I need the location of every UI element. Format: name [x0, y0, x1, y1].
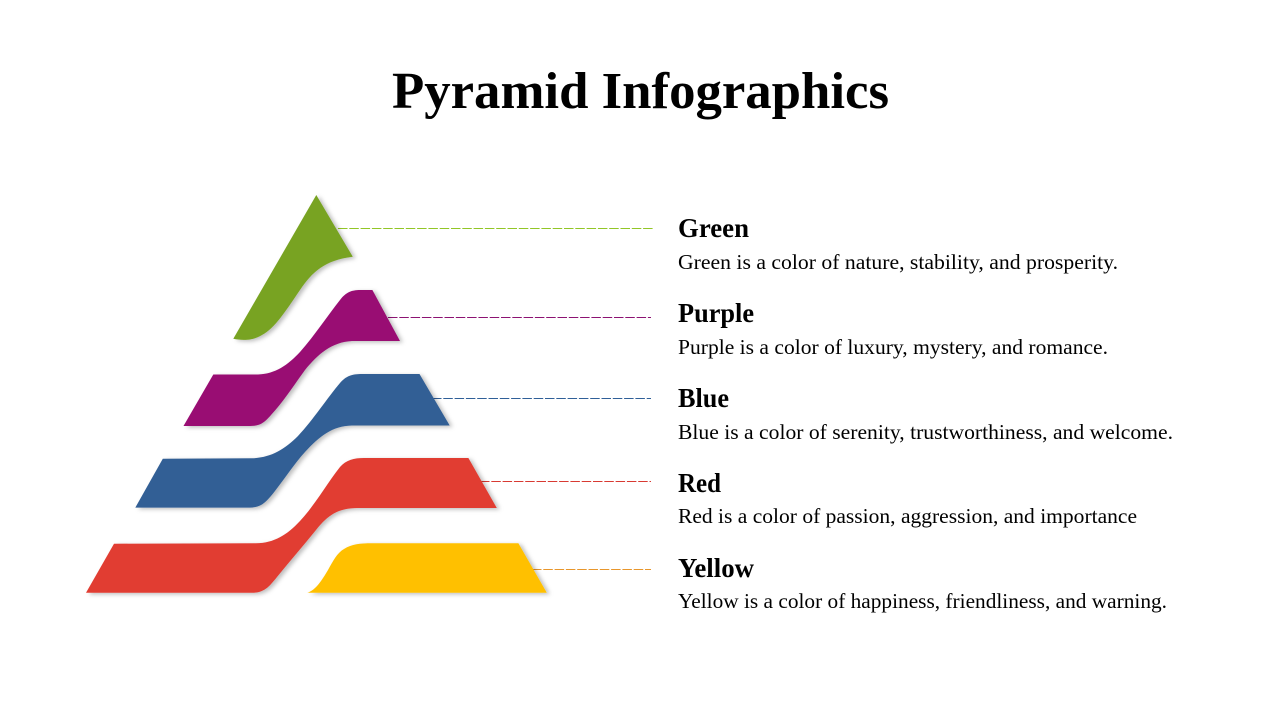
pyramid tier: purple	[184, 290, 400, 426]
leader line: purple	[388, 316, 651, 318]
leader line: blue	[432, 398, 651, 400]
leader line: green	[338, 228, 654, 230]
heading: blue: Blue	[678, 383, 729, 413]
heading: yellow: Yellow	[678, 553, 754, 583]
leader lines	[338, 228, 654, 570]
text block: yellow	[678, 553, 1167, 613]
pyramid tier: yellow	[307, 543, 547, 593]
text block: blue	[678, 383, 1173, 444]
pyramid tier: green	[233, 195, 353, 340]
heading: green: Green	[678, 213, 749, 243]
description: green: Green is a color of nature, stability, and prosperity.	[678, 250, 1118, 274]
text block: red	[678, 468, 1137, 528]
description: purple: Purple is a color of luxury, mystery, and romance.	[678, 335, 1108, 359]
pyramid	[86, 195, 547, 593]
leader line: yellow	[532, 568, 651, 570]
leader line: red	[480, 480, 651, 482]
pyramid tier: blue	[135, 374, 450, 508]
heading: red: Red	[678, 468, 721, 498]
heading: purple: Purple	[678, 298, 754, 328]
description: yellow: Yellow is a color of happiness, friendliness, and warning.	[678, 589, 1167, 613]
description: blue: Blue is a color of serenity, trustworthiness, and welcome.	[678, 420, 1173, 444]
title: Pyramid Infographics	[392, 63, 889, 120]
description: red: Red is a color of passion, aggression, and importance	[678, 504, 1137, 528]
text block: green	[678, 213, 1118, 274]
pyramid tier: red	[86, 458, 497, 593]
text block: purple	[678, 298, 1108, 359]
